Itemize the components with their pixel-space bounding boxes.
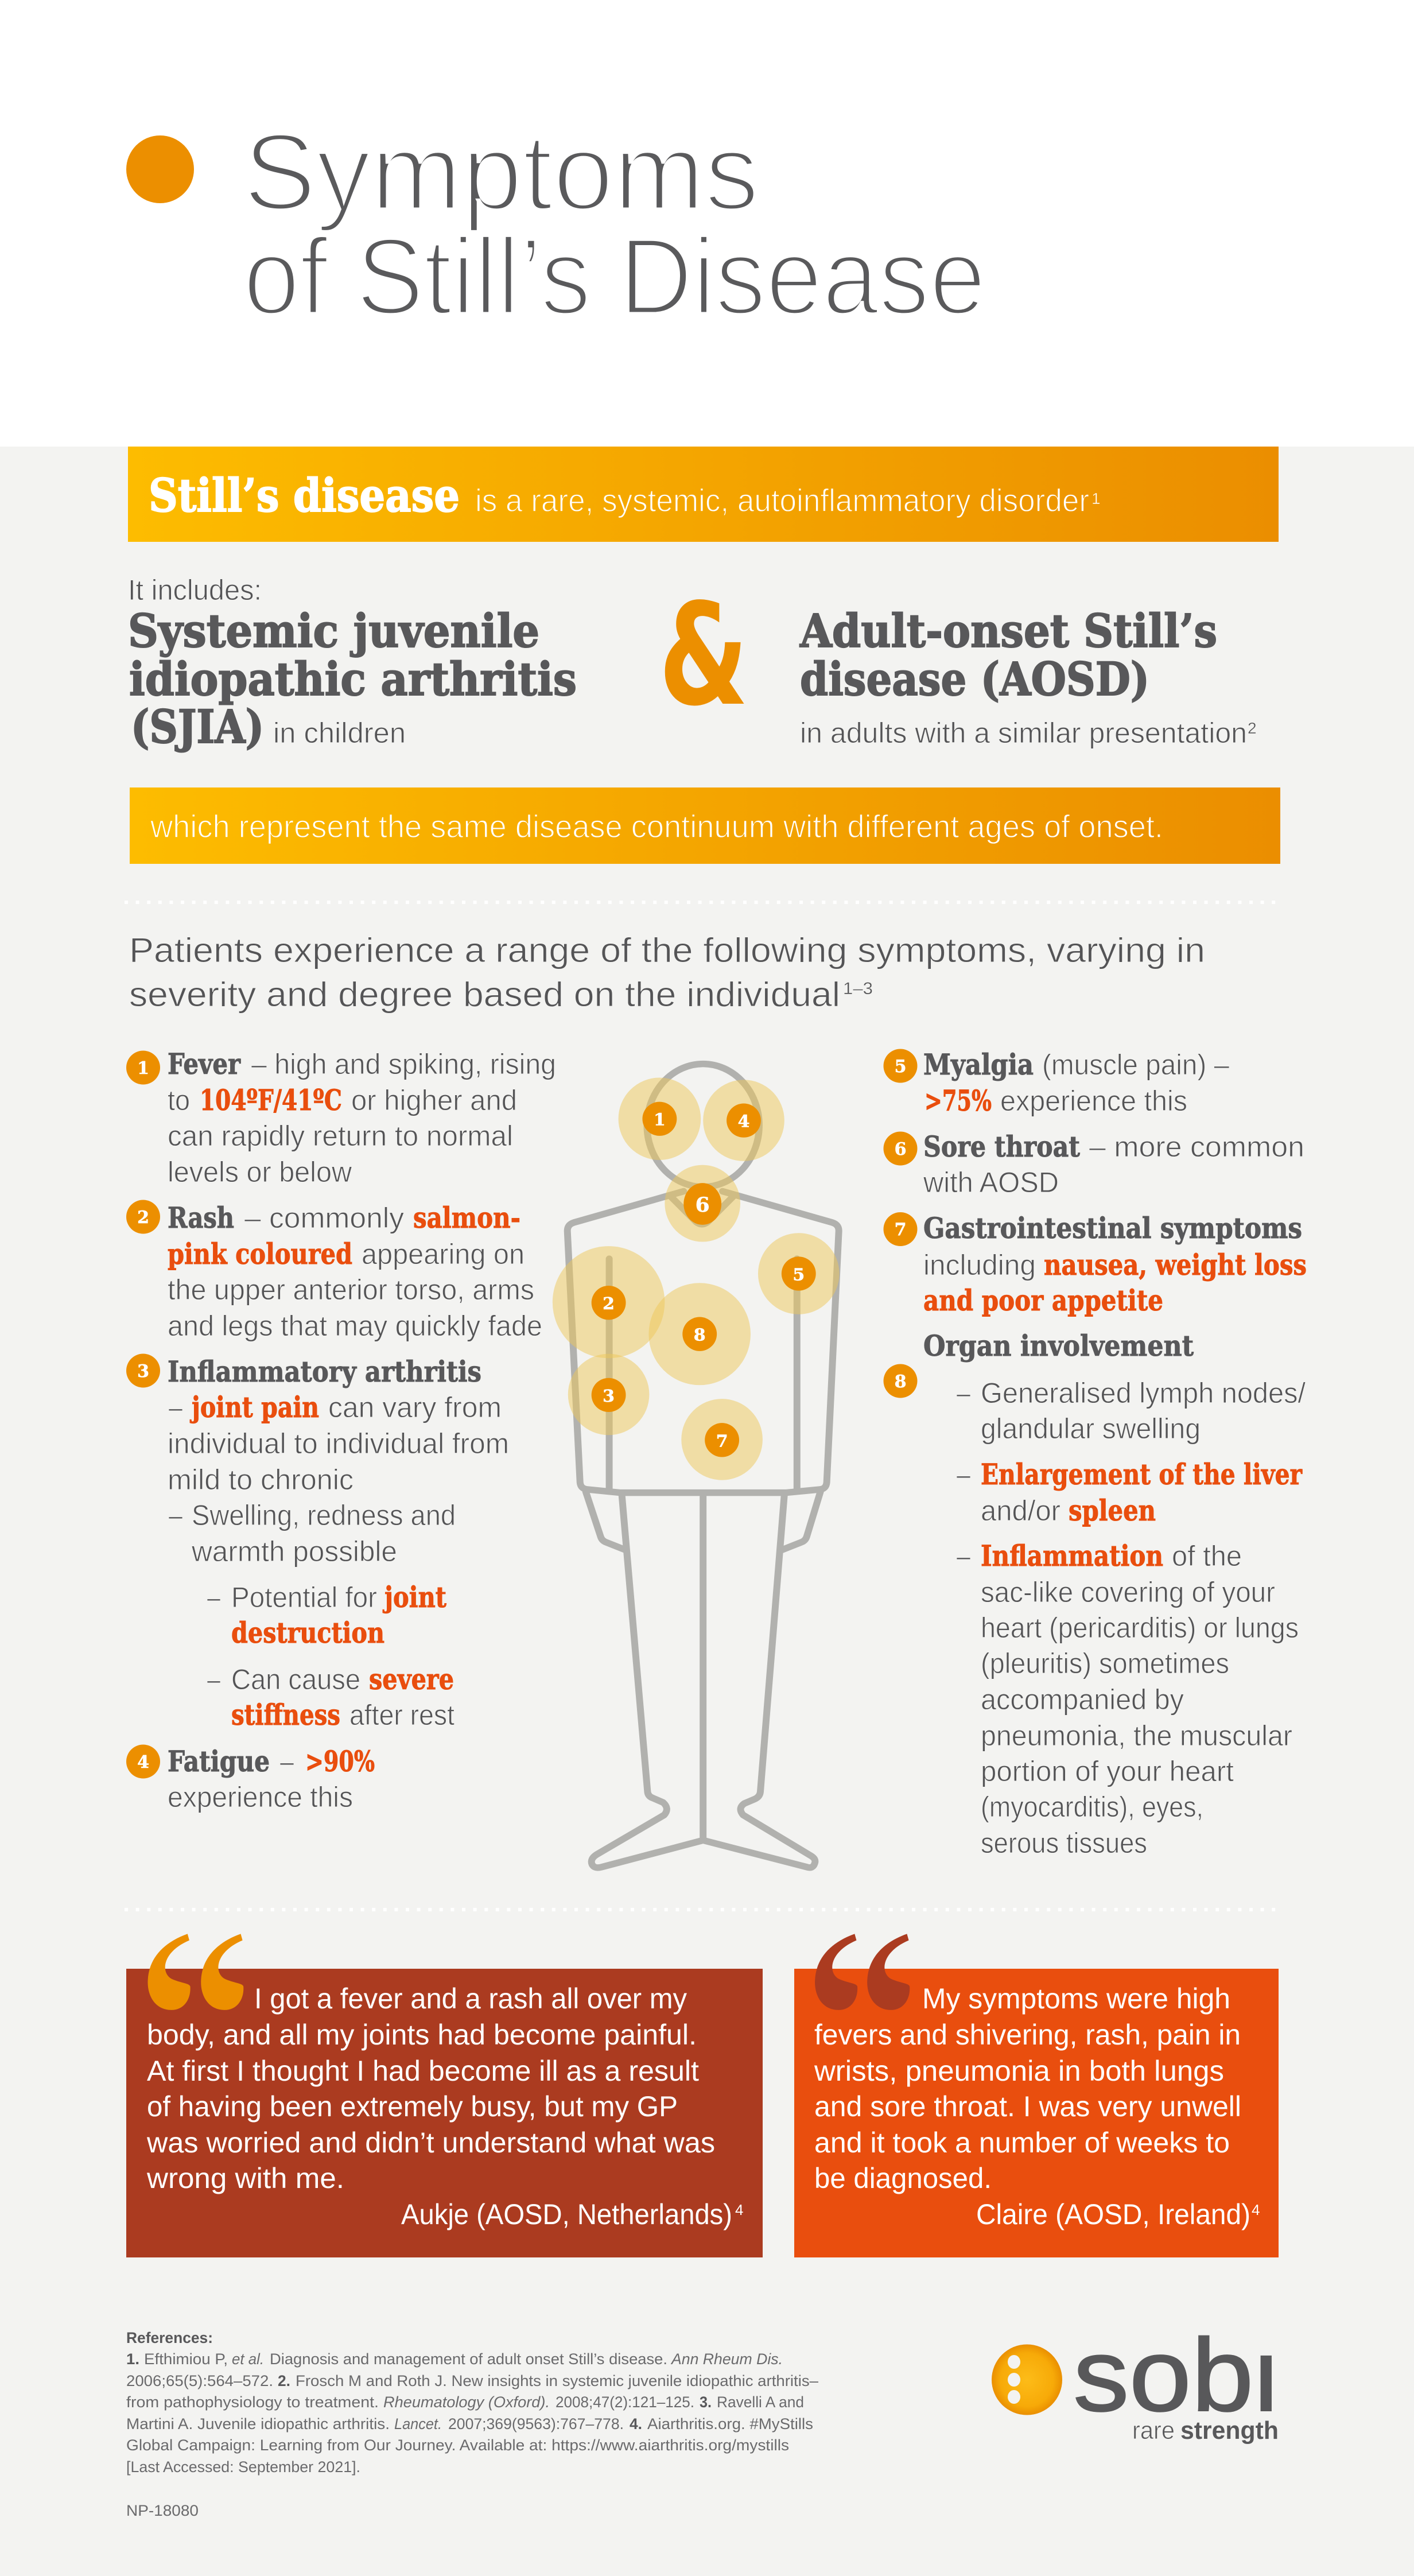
references: Lancet.	[394, 2415, 442, 2433]
symptom 6: sore throat	[884, 1130, 1304, 1198]
logo: sobi: sobi	[1073, 2318, 1279, 2433]
references: Ann Rheum Dis.	[670, 2350, 783, 2368]
symptom 8: organ involvement: Enlargement of the liver	[981, 1457, 1303, 1491]
right symptom list	[884, 1048, 1307, 1859]
symptom 1: fever: 104ºF/41ºC	[200, 1083, 342, 1117]
symptom 3: inflammatory arthritis: –	[169, 1499, 182, 1531]
symptom 1: fever: can rapidly return to normal	[168, 1120, 513, 1152]
symptom 8: organ involvement	[884, 1329, 1306, 1859]
icon: title dot	[126, 135, 194, 203]
symptom 3: inflammatory arthritis: joint	[383, 1580, 446, 1614]
logo: sobi: strength	[1180, 2416, 1279, 2445]
symptom 5: myalgia: 5	[895, 1057, 906, 1077]
symptom 8: organ involvement: and/or	[981, 1495, 1060, 1527]
icon: logo dot	[992, 2344, 1062, 2415]
numbered markers: 7	[716, 1431, 728, 1450]
symptom 8: organ involvement: portion of your heart	[981, 1755, 1234, 1787]
references: 2006;65(5):564–572.	[126, 2372, 273, 2389]
quote text: and it took a number of weeks to	[814, 2127, 1230, 2159]
symptom 2: rash: pink coloured	[168, 1237, 352, 1271]
symptom 4: fatigue: Fatigue	[168, 1744, 270, 1778]
symptom 7: gastrointestinal: 7	[895, 1220, 906, 1240]
references: 1.	[126, 2350, 139, 2368]
icon: quote mark orange	[148, 1934, 243, 2010]
symptom zone blobs	[553, 1077, 840, 1480]
symptom 3: inflammatory arthritis: Can cause	[231, 1663, 360, 1696]
logo: sobi: rare	[1132, 2416, 1175, 2445]
symptom 3: inflammatory arthritis: mild to chronic	[168, 1464, 354, 1496]
heading: SJIA: idiopathic arthritis	[129, 652, 577, 706]
symptom 8: organ involvement: –	[957, 1540, 970, 1572]
symptom 8: organ involvement: Generalised lymph nodes/	[981, 1377, 1306, 1409]
symptom 6: sore throat: with AOSD	[923, 1166, 1059, 1198]
intro paragraph: 1–3	[843, 979, 873, 998]
symptom 3: inflammatory arthritis: can vary from	[328, 1391, 502, 1423]
symptom 3: inflammatory arthritis: –	[207, 1663, 220, 1696]
quote text: body, and all my joints had become painful.	[147, 2019, 697, 2051]
heading: AOSD: 2	[1248, 719, 1257, 737]
references: Efthimiou P,	[144, 2350, 228, 2368]
symptom 3: inflammatory arthritis: stiffness	[231, 1698, 340, 1732]
heading: AOSD	[799, 604, 1257, 749]
numbered markers: 5	[793, 1264, 805, 1284]
banner: disease continuum	[130, 787, 1280, 864]
quote text: be diagnosed.	[814, 2162, 992, 2194]
references: Aiarthritis.org. #MyStills	[647, 2415, 813, 2433]
symptom 2: rash	[126, 1200, 542, 1342]
symptom 8: organ involvement: (myocarditis), eyes,	[981, 1791, 1203, 1823]
symptom 2: rash: 2	[137, 1208, 149, 1228]
title line 1: Symptoms	[243, 111, 759, 233]
references: Diagnosis and management of adult onset Still’s disease.	[270, 2350, 667, 2368]
references: References:	[126, 2329, 213, 2346]
quote text: and sore throat. I was very unwell	[814, 2090, 1241, 2123]
ampersand: &	[659, 573, 748, 737]
references: 2007;369(9563):767–778.	[448, 2415, 624, 2433]
symptom 3: inflammatory arthritis: Inflammatory arthritis	[168, 1355, 481, 1388]
quote text: I got a fever and a rash all over my	[254, 1983, 687, 2015]
symptom 5: myalgia	[884, 1048, 1229, 1118]
symptom 8: organ involvement: pneumonia, the muscular	[981, 1720, 1292, 1752]
heading: AOSD: Adult-onset Still’s	[799, 604, 1217, 658]
symptom 4: fatigue: –	[280, 1745, 294, 1778]
attribution: Claire (AOSD, Ireland)	[976, 2198, 1250, 2230]
banner: definition: is a rare, systemic, autoinflammatory disorder	[475, 482, 1089, 518]
symptom 3: inflammatory arthritis: individual to individual from	[168, 1427, 509, 1460]
symptom 1: fever: – high and spiking, rising	[251, 1048, 556, 1080]
heading: SJIA: in children	[273, 717, 406, 749]
symptom 7: gastrointestinal: including	[923, 1249, 1036, 1281]
symptom 3: inflammatory arthritis: after rest	[349, 1699, 454, 1731]
symptom 8: organ involvement: of the	[1172, 1540, 1242, 1572]
references: Global Campaign: Learning from Our Journey. Available at: https://www.aiarthritis.org/mystills	[126, 2437, 789, 2454]
references: from pathophysiology to treatment.	[126, 2393, 379, 2411]
symptom 8: organ involvement: spleen	[1069, 1493, 1156, 1527]
panel: quote Claire	[794, 1934, 1279, 2257]
symptom 3: inflammatory arthritis: –	[169, 1391, 182, 1423]
symptom 1: fever: levels or below	[168, 1156, 352, 1188]
references: [Last Accessed: September 2021].	[126, 2458, 360, 2476]
icon: quote mark dark	[815, 1934, 910, 2010]
symptom 3: inflammatory arthritis	[126, 1353, 509, 1732]
symptom 3: inflammatory arthritis: Swelling, redness and	[192, 1499, 456, 1531]
references: 2008;47(2):121–125.	[556, 2393, 694, 2411]
numbered markers: 4	[738, 1111, 749, 1131]
banner: definition: Still’s disease	[149, 468, 460, 522]
banner: definition	[128, 447, 1279, 542]
left symptom list	[126, 1047, 556, 1813]
symptom 6: sore throat: – more common	[1089, 1131, 1304, 1163]
numbered markers	[592, 1102, 816, 1457]
symptom 5: myalgia: >75%	[924, 1084, 992, 1118]
numbered markers: 1	[654, 1109, 666, 1130]
references: Frosch M and Roth J. New insights in systemic juvenile idiopathic arthritis–	[296, 2372, 818, 2389]
symptom 5: myalgia: Myalgia	[923, 1048, 1034, 1081]
symptom 2: rash: salmon-	[413, 1201, 520, 1235]
symptom 7: gastrointestinal: Gastrointestinal symptoms	[923, 1211, 1302, 1245]
quote text	[146, 1983, 715, 2194]
symptom 3: inflammatory arthritis: warmth possible	[191, 1535, 397, 1568]
heading: SJIA	[128, 604, 577, 754]
numbered markers: 6	[696, 1194, 710, 1217]
symptom 5: myalgia: experience this	[1000, 1085, 1187, 1117]
panel: quote Aukje	[126, 1934, 763, 2257]
numbered markers: 2	[603, 1294, 615, 1313]
symptom 2: rash: – commonly	[244, 1202, 404, 1234]
body figure with symptom markers	[553, 1064, 840, 1868]
references: 4.	[630, 2415, 642, 2433]
symptom 8: organ involvement: Organ involvement	[923, 1329, 1194, 1363]
symptom 8: organ involvement: accompanied by	[981, 1683, 1184, 1716]
symptom 7: gastrointestinal: nausea, weight loss	[1044, 1248, 1307, 1282]
symptom 1: fever: to	[168, 1084, 190, 1116]
references: Martini A. Juvenile idiopathic arthritis.	[126, 2415, 390, 2433]
symptom 7: gastrointestinal: and poor appetite	[923, 1283, 1163, 1317]
references: 3.	[700, 2393, 712, 2411]
symptom 4: fatigue: experience this	[168, 1781, 353, 1813]
symptom 2: rash: and legs that may quickly fade	[168, 1310, 542, 1342]
quote text: was worried and didn’t understand what was	[146, 2127, 715, 2159]
title block	[126, 111, 986, 337]
symptom 1: fever	[126, 1047, 556, 1188]
heading: AOSD: disease (AOSD)	[800, 652, 1149, 706]
symptom 3: inflammatory arthritis: severe	[369, 1662, 454, 1696]
symptom 6: sore throat: Sore throat	[923, 1130, 1080, 1163]
quote text: fevers and shivering, rash, pain in	[814, 2019, 1241, 2051]
symptom 3: inflammatory arthritis: destruction	[231, 1616, 384, 1650]
intro label: It includes:	[128, 574, 262, 606]
symptom 8: organ involvement: serous tissues	[981, 1827, 1147, 1859]
attribution: 4	[1252, 2201, 1260, 2218]
symptom 8: organ involvement: glandular swelling	[981, 1413, 1201, 1445]
symptom 2: rash: appearing on	[362, 1238, 525, 1270]
symptom 5: myalgia: (muscle pain) –	[1042, 1049, 1229, 1081]
symptom 1: fever: Fever	[168, 1047, 241, 1081]
intro paragraph: Patients experience a range of the following symptoms, varying in	[129, 931, 1205, 969]
symptom 8: organ involvement: sac-like covering of your	[981, 1576, 1275, 1608]
logo: sobi	[992, 2318, 1285, 2445]
references: Ravelli A and	[717, 2393, 804, 2411]
symptom 6: sore throat: 6	[895, 1139, 906, 1159]
symptom 8: organ involvement: heart (pericarditis) or lungs	[981, 1612, 1299, 1644]
banner: definition: 1	[1091, 490, 1101, 507]
numbered markers: 8	[694, 1325, 706, 1345]
intro paragraph: severity and degree based on the individual	[129, 975, 840, 1014]
quote text: At first I thought I had become ill as a result	[147, 2055, 699, 2087]
quote text: wrong with me.	[146, 2162, 344, 2194]
numbered markers: 3	[603, 1386, 615, 1406]
references: Rheumatology (Oxford).	[383, 2393, 550, 2411]
symptom 4: fatigue	[126, 1744, 375, 1813]
symptom 2: rash: the upper anterior torso, arms	[168, 1274, 534, 1306]
symptom 7: gastrointestinal	[884, 1211, 1307, 1317]
references: et al.	[232, 2350, 264, 2368]
heading: SJIA: (SJIA)	[131, 700, 264, 754]
symptom 3: inflammatory arthritis: Potential for	[231, 1581, 377, 1613]
heading: AOSD: in adults with a similar presentation	[800, 717, 1247, 749]
attribution: 4	[735, 2201, 743, 2218]
symptom 8: organ involvement: –	[957, 1377, 970, 1409]
symptom 3: inflammatory arthritis: 3	[137, 1361, 149, 1382]
title line 2: of Still’s Disease	[243, 216, 986, 337]
symptom 4: fatigue: >90%	[305, 1744, 375, 1778]
heading: SJIA: Systemic juvenile	[128, 604, 539, 658]
quote text: wrists, pneumonia in both lungs	[814, 2055, 1224, 2087]
symptom 2: rash: Rash	[168, 1201, 234, 1235]
symptom 4: fatigue: 4	[137, 1752, 149, 1772]
symptom 3: inflammatory arthritis: –	[207, 1581, 220, 1613]
body outline	[568, 1064, 839, 1868]
symptom 1: fever: or higher and	[351, 1084, 517, 1116]
quote text: of having been extremely busy, but my GP	[147, 2090, 678, 2123]
symptom 3: inflammatory arthritis: joint pain	[190, 1390, 319, 1424]
symptom 1: fever: 1	[137, 1058, 149, 1078]
banner: disease continuum: which represent the same disease continuum with different ages of onset.	[150, 808, 1163, 844]
references: 2.	[278, 2372, 290, 2389]
symptom 8: organ involvement: (pleuritis) sometimes	[981, 1647, 1229, 1679]
references	[126, 2329, 818, 2476]
symptom 8: organ involvement: 8	[895, 1372, 906, 1392]
symptom 8: organ involvement: –	[957, 1458, 970, 1491]
symptom 8: organ involvement: Inflammation	[981, 1539, 1163, 1573]
attribution: Aukje (AOSD, Netherlands)	[401, 2198, 732, 2230]
document code: NP-18080	[126, 2502, 199, 2519]
quote text: My symptoms were high	[922, 1983, 1230, 2015]
intro paragraph	[129, 931, 1205, 1014]
quote text	[814, 1983, 1241, 2194]
